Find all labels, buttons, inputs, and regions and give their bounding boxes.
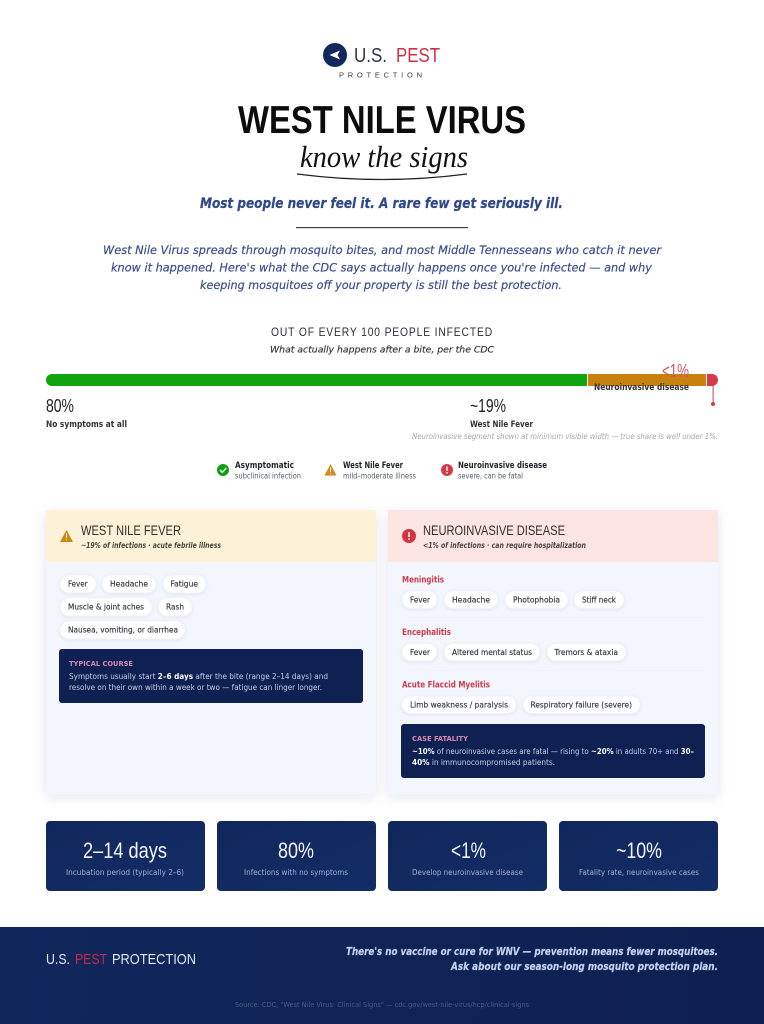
label: 80 percent: 80% [46, 396, 74, 416]
footer call to action [346, 946, 718, 973]
chart heading: OUT OF EVERY 100 PEOPLE INFECTED [271, 325, 493, 339]
symptom pills: Rash [166, 602, 184, 612]
legend: West Nile Fever: West Nile Fever [343, 461, 404, 471]
symptom pills: Fatigue [170, 580, 198, 588]
label: 19 percent [470, 396, 534, 430]
footer logo [46, 951, 196, 968]
stat: incubation period: 2–14 days [83, 838, 167, 863]
group: Encephalitis: Altered mental status [452, 648, 532, 657]
stacked bar chart [46, 374, 718, 406]
legend: asymptomatic: subclinical infection [235, 472, 301, 480]
legend: West Nile Fever [324, 461, 416, 480]
label: 80 percent [46, 396, 127, 430]
symptom pills: Headache [110, 580, 148, 588]
group: Meningitis: Headache [452, 596, 490, 604]
footer logo: PEST [75, 951, 107, 968]
panel header: Neuroinvasive Disease: <1% of infections · can require hospitalization [423, 541, 586, 550]
footer logo: U.S. [46, 951, 70, 968]
callout: typical course: TYPICAL COURSE [69, 660, 133, 668]
stat: neuroinvasive share [388, 821, 547, 891]
callout: typical course: resolve on their own within a week or two — fatigue can linger longer. [69, 683, 322, 692]
symptom pills [60, 575, 206, 639]
footer logo: PROTECTION [112, 951, 196, 968]
group: Encephalitis: Encephalitis [402, 628, 451, 638]
panel header: Neuroinvasive Disease [388, 510, 718, 562]
chart footnote: Neuroinvasive segment shown at minimum visible width — true share is well under 1%. [412, 432, 718, 441]
panel header: West Nile Fever [46, 510, 376, 562]
callout: case fatality: ~10% of neuroinvasive cases are fatal — rising to ~20% in adults 70+ and 30– [412, 747, 694, 756]
intro paragraph: keeping mosquitoes off your property is still the best protection. [200, 278, 562, 292]
legend [217, 461, 547, 480]
script subtitle with underline: know the signs [300, 139, 468, 174]
stat: neuroinvasive share: Develop neuroinvasive disease [412, 868, 523, 877]
segment: asymptomatic 80% [46, 374, 587, 386]
logo: U.S. Pest Protection [323, 43, 440, 80]
label: under 1%: <1% [662, 361, 689, 381]
callout: case fatality [401, 724, 705, 778]
panel header: West Nile Fever: WEST NILE FEVER [81, 522, 181, 538]
logo wordmark PEST: PEST [396, 45, 440, 67]
stat cards [46, 821, 718, 891]
group: Meningitis: Stiff neck [582, 596, 616, 604]
stat: no symptoms [217, 821, 376, 891]
callout: typical course [59, 649, 363, 703]
icon: logo badge [323, 43, 347, 67]
label: 80 percent: No symptoms at all [46, 420, 127, 430]
group: Encephalitis: Tremors & ataxia [554, 648, 618, 657]
legend: asymptomatic: Asymptomatic [235, 461, 294, 471]
group: Acute Flaccid Myelitis [402, 680, 640, 714]
stat: no symptoms: 80% [278, 838, 314, 863]
callout: case fatality: CASE FATALITY [412, 735, 469, 743]
footer [0, 927, 764, 1024]
legend: neuroinvasive disease: severe, can be fatal [458, 472, 523, 480]
group: Meningitis [402, 576, 624, 608]
group: Encephalitis [402, 628, 626, 661]
group: Meningitis: Photophobia [513, 596, 560, 604]
group: Acute Flaccid Myelitis: Acute Flaccid Myelitis [402, 680, 490, 690]
callout: typical course: Symptoms usually start 2–6 days after the bite (range 2–14 days) and [69, 672, 328, 681]
legend: neuroinvasive disease [441, 461, 547, 480]
panel: Neuroinvasive Disease [388, 510, 718, 794]
group: Acute Flaccid Myelitis: Limb weakness / paralysis [410, 700, 508, 710]
intro paragraph: West Nile Virus spreads through mosquito bites, and most Middle Tennesseans who catch it never [103, 243, 662, 257]
stat: incubation period [46, 821, 205, 891]
group: Acute Flaccid Myelitis: Respiratory failure (severe) [530, 700, 632, 710]
stat: fatality rate: Fatality rate, neuroinvasive cases [579, 868, 699, 877]
symptom pills: Fever [68, 580, 88, 588]
logo wordmark PROTECTION: PROTECTION [339, 70, 422, 80]
icon: warning triangle [60, 530, 73, 542]
legend: neuroinvasive disease: Neuroinvasive disease [458, 461, 547, 471]
title: WEST NILE VIRUS [238, 99, 526, 142]
group: Meningitis: Fever [410, 596, 431, 604]
stat: neuroinvasive share: <1% [451, 838, 486, 863]
legend: asymptomatic [217, 461, 301, 480]
logo wordmark U.S.: U.S. [354, 45, 387, 67]
panel: West Nile Fever [46, 510, 376, 794]
icon: alert circle [402, 529, 416, 543]
symptom pills: Muscle & joint aches [68, 602, 144, 612]
legend: West Nile Fever: mild–moderate illness [343, 472, 416, 480]
label: 19 percent: West Nile Fever [470, 420, 534, 430]
stat: fatality rate: ~10% [616, 838, 662, 863]
panel header: West Nile Fever: ~19% of infections · acute febrile illness [81, 541, 221, 550]
source line: Source: CDC, "West Nile Virus: Clinical Signs" — cdc.gov/west-nile-virus/hcp/clinical-signs [235, 1001, 529, 1009]
panel header: Neuroinvasive Disease: NEUROINVASIVE DISEASE [423, 522, 565, 538]
intro paragraph [103, 243, 662, 292]
stat: incubation period: Incubation period (typically 2–6) [66, 868, 184, 877]
intro paragraph: know it happened. Here's what the CDC says actually happens once you're infected — and why [111, 260, 652, 274]
callout: case fatality: 40% in immunocompromised patients. [412, 758, 555, 767]
footer call to action: Ask about our season-long mosquito protection plan. [450, 961, 718, 973]
pin marker [711, 386, 715, 406]
label: 19 percent: ~19% [470, 396, 506, 416]
label: neuroinvasive disease: Neuroinvasive disease [594, 383, 689, 393]
group: Encephalitis: Fever [410, 648, 431, 657]
group: Meningitis: Meningitis [402, 576, 444, 586]
tagline: Most people never feel it. A rare few get seriously ill. [200, 196, 563, 212]
stat: no symptoms: Infections with no symptoms [244, 868, 348, 877]
stat: fatality rate [559, 821, 718, 891]
symptom pills: Nausea, vomiting, or diarrhea [68, 626, 178, 634]
segment: West Nile Fever 19% [588, 374, 706, 386]
segment: neuroinvasive under 1% [707, 374, 718, 386]
chart subheading: What actually happens after a bite, per the CDC [270, 346, 495, 356]
